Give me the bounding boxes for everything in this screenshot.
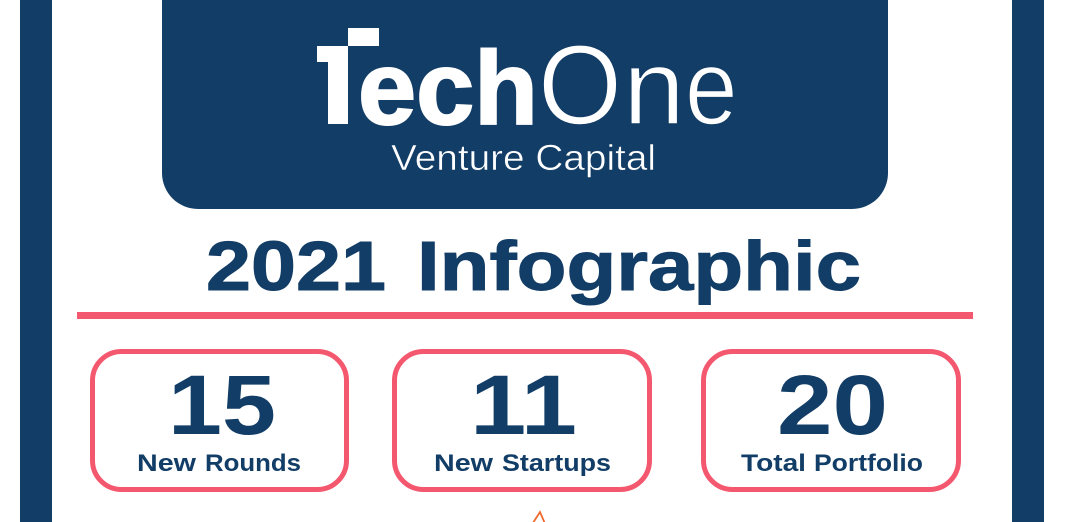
stat label: New: [434, 450, 494, 477]
stat label: [741, 450, 923, 477]
title: Infographic: [417, 227, 861, 305]
stat label: Total: [741, 450, 806, 477]
stat number: 11: [470, 358, 577, 452]
logo: TechOne: e: [685, 27, 738, 147]
stat card: total portfolio: [704, 352, 958, 490]
stat label: Portfolio: [814, 450, 923, 477]
stat card: new rounds: [92, 352, 346, 490]
stat label: New: [137, 450, 197, 477]
logo: TechOne: T: [306, 22, 375, 148]
stat label: Startups: [502, 450, 611, 477]
stat label: [137, 450, 301, 477]
header panel: [162, 0, 888, 209]
logo subtitle: Venture Capital: [391, 137, 656, 178]
logo: TechOne: O: [538, 22, 622, 148]
right side bar: [1012, 0, 1044, 522]
left side bar: [20, 0, 52, 522]
title: 2021: [206, 227, 386, 305]
stat card: new startups: [394, 352, 650, 490]
stat label: [434, 450, 611, 477]
stat label: Rounds: [205, 450, 301, 477]
logo: TechOne: [317, 28, 733, 126]
icon: flame tip: [531, 512, 546, 522]
logo: TechOne: ech: [358, 31, 538, 147]
logo: TechOne: n: [623, 27, 685, 147]
stat number: 15: [168, 358, 276, 452]
title divider: [77, 312, 973, 319]
stat number: 20: [777, 358, 888, 452]
title: [206, 227, 861, 305]
